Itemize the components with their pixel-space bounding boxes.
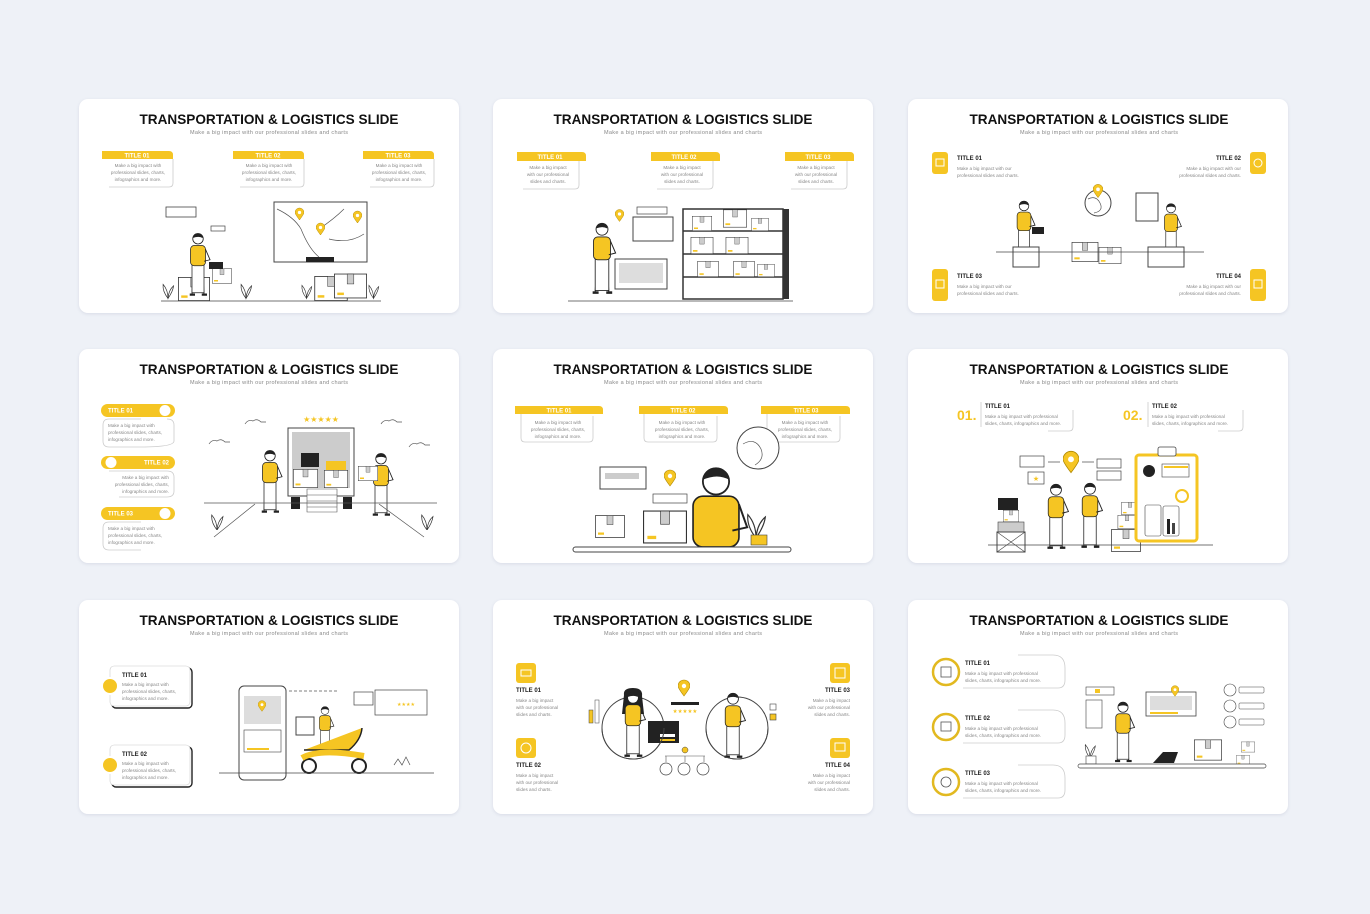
item: title 03: slides and charts. bbox=[814, 712, 850, 717]
callout: title 01: Make a big impact bbox=[529, 165, 567, 170]
item: title 02 bbox=[933, 710, 1065, 743]
illustration: two people in circles bbox=[589, 680, 776, 775]
item: title 01 bbox=[516, 663, 558, 717]
item: title 02: Make a big impact with professional bbox=[965, 726, 1038, 731]
callout: title 02: TITLE 02 bbox=[255, 154, 281, 160]
callout: title 02 bbox=[651, 152, 720, 189]
callout: title 01 bbox=[515, 406, 603, 442]
item: title 03: TITLE 03 bbox=[825, 688, 851, 694]
illustration: people, globe, boxes bbox=[996, 184, 1204, 267]
box: title 01: professional slides, charts, bbox=[122, 689, 176, 694]
item: title 03: TITLE 03 bbox=[965, 771, 991, 777]
item: 01: Make a big impact with professional bbox=[985, 414, 1058, 419]
item: 01: TITLE 01 bbox=[985, 404, 1011, 410]
tab: title 02 bbox=[101, 456, 175, 497]
item: title 02: with our professional bbox=[516, 780, 558, 785]
box: title 01: Make a big impact with bbox=[122, 682, 169, 687]
illustration: two people in circles: ★★★★★ bbox=[673, 708, 697, 715]
callout: title 01: infographics and more. bbox=[115, 177, 161, 182]
callout: title 02: TITLE 02 bbox=[670, 408, 696, 414]
illustration: truck unloading bbox=[204, 415, 437, 537]
item: title 03: TITLE 03 bbox=[957, 274, 983, 280]
item: title 04 bbox=[808, 738, 851, 792]
tab: title 01: Make a big impact with bbox=[108, 423, 155, 428]
item: title 01 bbox=[933, 655, 1065, 688]
item: title 02: slides and charts. bbox=[516, 787, 552, 792]
callout: title 01: TITLE 01 bbox=[124, 154, 150, 160]
item: title 02: Make a big impact with our bbox=[1186, 166, 1241, 171]
callout: title 01: infographics and more. bbox=[535, 434, 581, 439]
item: title 01 bbox=[932, 152, 1019, 178]
tab: title 02: professional slides, charts, bbox=[115, 482, 169, 487]
tab: title 03: Make a big impact with bbox=[108, 526, 155, 531]
item: title 03 bbox=[932, 269, 1019, 301]
title: Make a big impact with our professional slides and charts bbox=[190, 631, 348, 637]
card 5: parcel counter bbox=[493, 349, 873, 563]
item: title 02 bbox=[1179, 152, 1266, 178]
title bbox=[140, 111, 398, 136]
illustration: truck unloading: ★★★★★ bbox=[303, 415, 339, 424]
callout: title 02: professional slides, charts, bbox=[655, 427, 709, 432]
callout: title 01: Make a big impact with bbox=[115, 163, 162, 168]
callout: title 01 bbox=[517, 152, 586, 189]
callout: title 03: Make a big impact with bbox=[782, 420, 829, 425]
card 6: handshake with clipboard bbox=[908, 349, 1288, 563]
item: title 03 bbox=[933, 765, 1065, 798]
title bbox=[140, 612, 398, 637]
item: title 01: Make a big impact with professional bbox=[965, 671, 1038, 676]
item: title 01: with our professional bbox=[516, 705, 558, 710]
callout: title 02: Make a big impact with bbox=[659, 420, 706, 425]
callout: title 03: slides and charts. bbox=[798, 179, 834, 184]
callout: title 03: Make a big impact with bbox=[376, 163, 423, 168]
item: title 03: Make a big impact with professional bbox=[965, 781, 1038, 786]
box: title 02: Make a big impact with bbox=[122, 761, 169, 766]
title: Make a big impact with our professional slides and charts bbox=[190, 130, 348, 136]
item: title 01: Make a big impact with our bbox=[957, 166, 1012, 171]
callout: title 03: infographics and more. bbox=[376, 177, 422, 182]
callout: title 03: Make a big impact bbox=[797, 165, 835, 170]
item: 02 bbox=[1123, 402, 1243, 431]
item: title 01: Make a big impact bbox=[516, 698, 554, 703]
item: title 04 bbox=[1179, 269, 1266, 301]
callout: title 03: infographics and more. bbox=[782, 434, 828, 439]
callout: title 02 bbox=[639, 406, 728, 442]
item: title 02: slides, charts, infographics and more. bbox=[965, 733, 1041, 738]
callout: title 01: with our professional bbox=[527, 172, 569, 177]
box: title 02: infographics and more. bbox=[122, 775, 169, 780]
callout: title 03: TITLE 03 bbox=[793, 408, 819, 414]
callout: title 01 bbox=[102, 151, 173, 187]
title: Make a big impact with our professional slides and charts bbox=[604, 380, 762, 386]
card 1: map slide bbox=[79, 99, 459, 313]
callout: title 03 bbox=[761, 406, 850, 442]
callout: title 02: Make a big impact with bbox=[246, 163, 293, 168]
item: title 01: TITLE 01 bbox=[957, 156, 983, 162]
callout: title 02: infographics and more. bbox=[659, 434, 705, 439]
illustration: woman with laptop and map bbox=[161, 202, 381, 301]
illustration: courier with map bbox=[1078, 684, 1266, 768]
item: title 01: slides, charts, infographics and more. bbox=[965, 678, 1041, 683]
box: title 02 bbox=[102, 745, 192, 787]
callout: title 02: infographics and more. bbox=[246, 177, 292, 182]
card 3: four titles with icons bbox=[908, 99, 1288, 313]
card 2: warehouse shelves bbox=[493, 99, 873, 313]
item: title 03: slides, charts, infographics and more. bbox=[965, 788, 1041, 793]
title: Make a big impact with our professional slides and charts bbox=[1020, 631, 1178, 637]
item: title 02 bbox=[516, 738, 558, 792]
callout: title 01: TITLE 01 bbox=[537, 155, 563, 161]
item: 01 bbox=[957, 402, 1073, 431]
item: title 02: professional slides and charts. bbox=[1179, 173, 1241, 178]
box: title 02: professional slides, charts, bbox=[122, 768, 176, 773]
item: 02: Make a big impact with professional bbox=[1152, 414, 1225, 419]
item: title 01: TITLE 01 bbox=[965, 661, 991, 667]
title: TRANSPORTATION & LOGISTICS SLIDE bbox=[970, 612, 1228, 628]
title bbox=[970, 361, 1228, 386]
callout: title 02: Make a big impact bbox=[663, 165, 701, 170]
illustration: phone and scooter: ★★★★ bbox=[397, 702, 415, 708]
item: title 04: with our professional bbox=[808, 780, 850, 785]
title bbox=[554, 111, 812, 136]
title: Make a big impact with our professional slides and charts bbox=[604, 130, 762, 136]
item: title 04: professional slides and charts. bbox=[1179, 291, 1241, 296]
title bbox=[970, 111, 1228, 136]
item: title 02: TITLE 02 bbox=[1216, 156, 1242, 162]
title bbox=[554, 612, 812, 637]
item: 01: slides, charts, infographics and more. bbox=[985, 421, 1061, 426]
title: TRANSPORTATION & LOGISTICS SLIDE bbox=[970, 361, 1228, 377]
title: TRANSPORTATION & LOGISTICS SLIDE bbox=[140, 111, 398, 127]
item: title 04: Make a big impact bbox=[813, 773, 851, 778]
callout: title 01: slides and charts. bbox=[530, 179, 566, 184]
tab: title 03: infographics and more. bbox=[108, 540, 155, 545]
item: title 02: Make a big impact bbox=[516, 773, 554, 778]
title: Make a big impact with our professional slides and charts bbox=[1020, 380, 1178, 386]
callout: title 03 bbox=[785, 152, 854, 189]
item: title 04: Make a big impact with our bbox=[1186, 284, 1241, 289]
illustration: worker and shelves bbox=[568, 207, 793, 301]
card 4: truck delivery bbox=[79, 349, 459, 563]
card 9: three circle icons with map bbox=[908, 600, 1288, 814]
item: title 03: Make a big impact with our bbox=[957, 284, 1012, 289]
item: title 03: with our professional bbox=[808, 705, 850, 710]
box: title 01: infographics and more. bbox=[122, 696, 169, 701]
card 8: customer service circles bbox=[493, 600, 873, 814]
box: title 01 bbox=[102, 666, 192, 708]
item: title 01: professional slides and charts. bbox=[957, 173, 1019, 178]
title bbox=[140, 361, 398, 386]
tab: title 01 bbox=[101, 404, 175, 447]
callout: title 03: professional slides, charts, bbox=[778, 427, 832, 432]
callout: title 03 bbox=[363, 151, 434, 187]
item: title 04: TITLE 04 bbox=[1216, 274, 1242, 280]
item: title 04: slides and charts. bbox=[814, 787, 850, 792]
title: TRANSPORTATION & LOGISTICS SLIDE bbox=[554, 361, 812, 377]
title: Make a big impact with our professional slides and charts bbox=[190, 380, 348, 386]
item: title 02: TITLE 02 bbox=[965, 716, 991, 722]
title: Make a big impact with our professional slides and charts bbox=[604, 631, 762, 637]
box: title 01: TITLE 01 bbox=[122, 673, 148, 679]
illustration: handshake and clipboard: ★ bbox=[1033, 475, 1039, 483]
box: title 02: TITLE 02 bbox=[122, 752, 148, 758]
callout: title 03: TITLE 03 bbox=[385, 154, 411, 160]
item: title 01: TITLE 01 bbox=[516, 688, 542, 694]
title: TRANSPORTATION & LOGISTICS SLIDE bbox=[554, 111, 812, 127]
title bbox=[970, 612, 1228, 637]
item: title 03 bbox=[808, 663, 851, 717]
tab: title 03 bbox=[101, 507, 175, 550]
card 7: scooter courier bbox=[79, 600, 459, 814]
callout: title 03: TITLE 03 bbox=[805, 155, 831, 161]
title bbox=[554, 361, 812, 386]
item: title 03: Make a big impact bbox=[813, 698, 851, 703]
tab: title 01: professional slides, charts, bbox=[108, 430, 162, 435]
callout: title 03: professional slides, charts, bbox=[372, 170, 426, 175]
item: title 02: TITLE 02 bbox=[516, 763, 542, 769]
callout: title 02: slides and charts. bbox=[664, 179, 700, 184]
title: TRANSPORTATION & LOGISTICS SLIDE bbox=[970, 111, 1228, 127]
callout: title 01: professional slides, charts, bbox=[111, 170, 165, 175]
title: TRANSPORTATION & LOGISTICS SLIDE bbox=[554, 612, 812, 628]
title: TRANSPORTATION & LOGISTICS SLIDE bbox=[140, 361, 398, 377]
callout: title 02: TITLE 02 bbox=[671, 155, 697, 161]
item: title 03: professional slides and charts. bbox=[957, 291, 1019, 296]
tab: title 03: professional slides, charts, bbox=[108, 533, 162, 538]
callout: title 02: professional slides, charts, bbox=[242, 170, 296, 175]
tab: title 01: TITLE 01 bbox=[108, 408, 134, 414]
item: 02: slides, charts, infographics and more. bbox=[1152, 421, 1228, 426]
illustration: handshake and clipboard bbox=[988, 447, 1213, 552]
callout: title 02: with our professional bbox=[661, 172, 703, 177]
item: title 01: slides and charts. bbox=[516, 712, 552, 717]
callout: title 02 bbox=[233, 151, 304, 187]
tab: title 03: TITLE 03 bbox=[108, 512, 134, 518]
tab: title 01: infographics and more. bbox=[108, 437, 155, 442]
callout: title 01: TITLE 01 bbox=[546, 408, 572, 414]
tab: title 02: TITLE 02 bbox=[144, 460, 170, 466]
callout: title 01: professional slides, charts, bbox=[531, 427, 585, 432]
tab: title 02: infographics and more. bbox=[122, 489, 169, 494]
illustration: clerk with parcels bbox=[573, 427, 791, 552]
item: 02: TITLE 02 bbox=[1152, 404, 1178, 410]
item: 01: 01. bbox=[957, 407, 976, 423]
item: 02: 02. bbox=[1123, 407, 1142, 423]
tab: title 02: Make a big impact with bbox=[122, 475, 169, 480]
illustration: phone and scooter bbox=[219, 686, 434, 780]
title: Make a big impact with our professional slides and charts bbox=[1020, 130, 1178, 136]
callout: title 01: Make a big impact with bbox=[535, 420, 582, 425]
callout: title 03: with our professional bbox=[795, 172, 837, 177]
item: title 04: TITLE 04 bbox=[825, 763, 851, 769]
title: TRANSPORTATION & LOGISTICS SLIDE bbox=[140, 612, 398, 628]
